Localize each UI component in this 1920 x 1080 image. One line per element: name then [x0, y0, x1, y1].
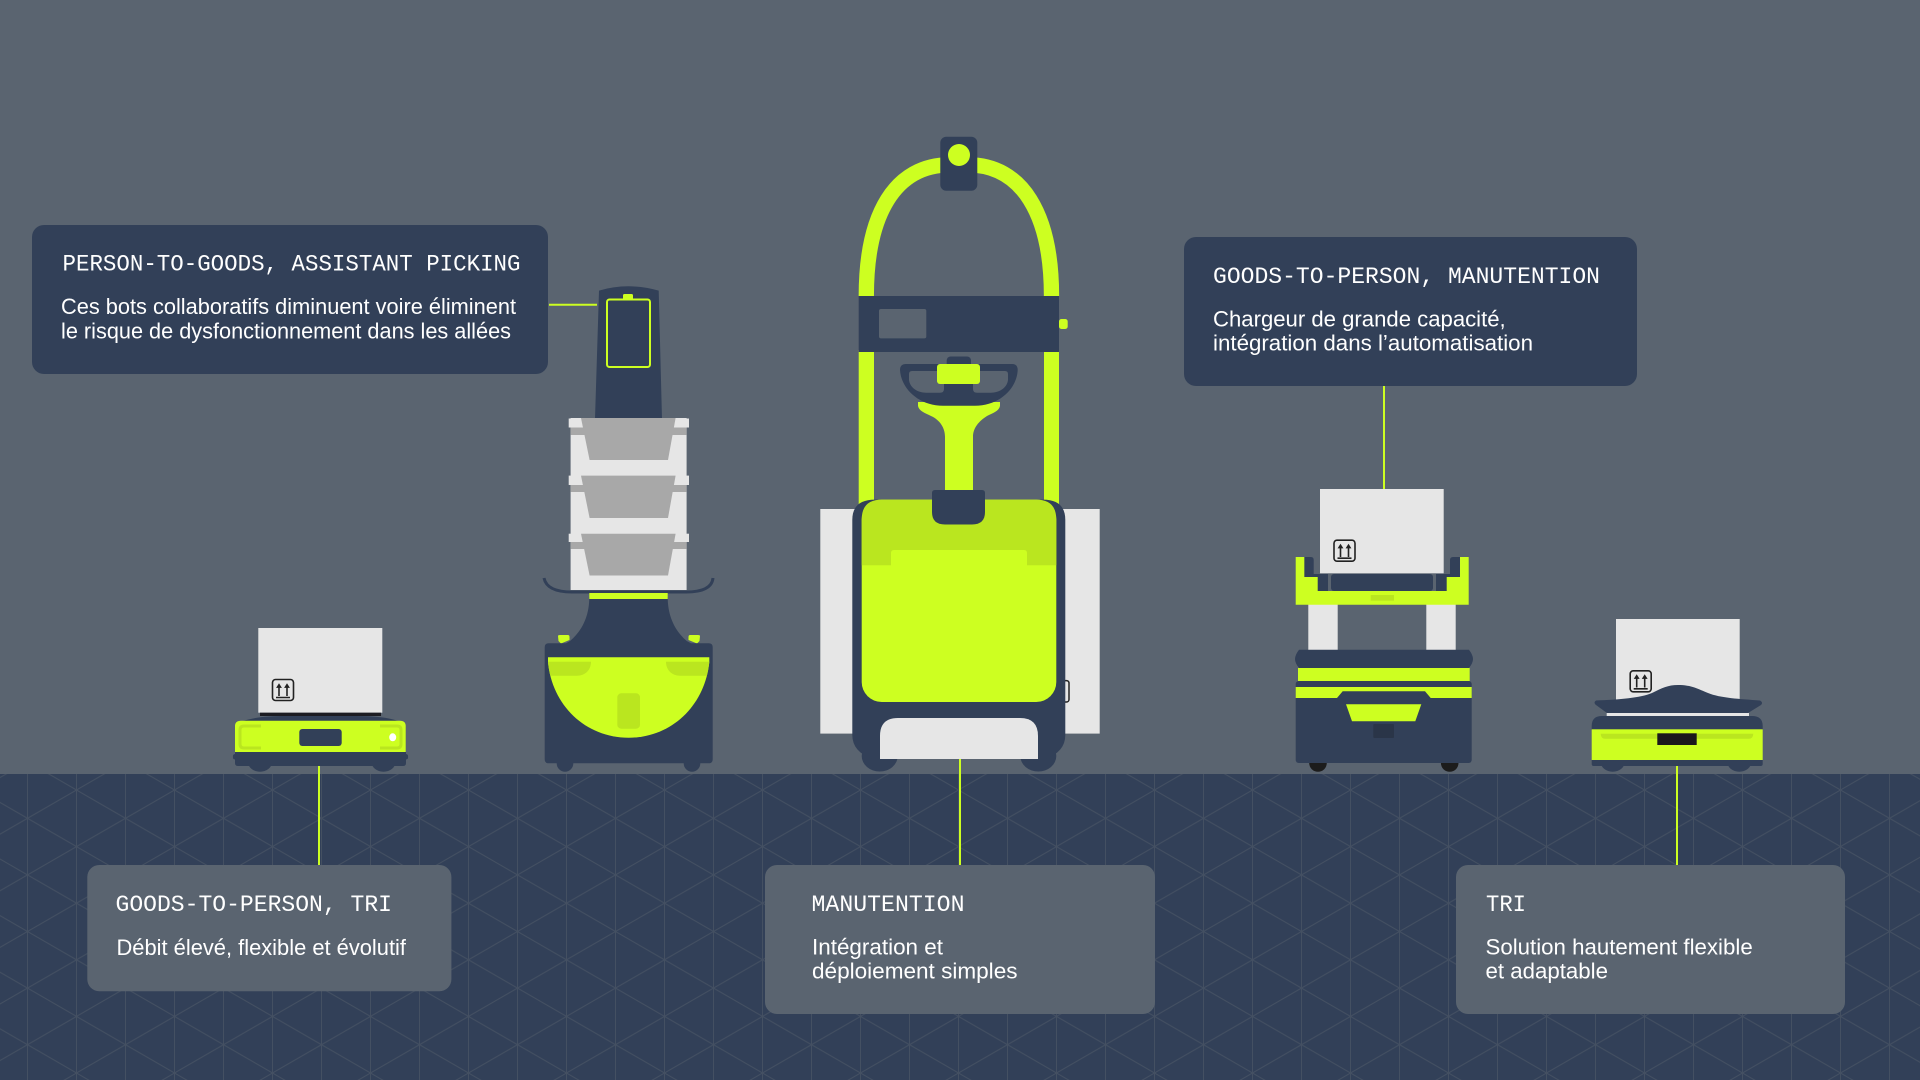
wheels	[557, 755, 700, 772]
description: et adaptable	[1486, 959, 1608, 984]
callout: goods-to-person, tri	[87, 865, 451, 991]
box	[1320, 489, 1444, 573]
icon: this side up	[1334, 540, 1355, 561]
lime trapezoid	[1346, 704, 1421, 721]
box	[258, 628, 382, 713]
mound cover	[1594, 685, 1762, 713]
robot: person-to-goods picking assistant	[544, 286, 713, 772]
connector: goods-to-person manutention	[1383, 386, 1385, 490]
robot: sorting flat	[1592, 619, 1763, 772]
bowl shading	[545, 662, 712, 729]
callout: person-to-goods, assistant picking	[32, 225, 548, 374]
connector: assistant picking	[549, 304, 597, 306]
neck and base	[545, 597, 713, 763]
steering stem	[918, 402, 1000, 495]
robot: goods-to-person sorting	[233, 628, 408, 772]
description	[1213, 306, 1533, 356]
steering handle	[900, 356, 1018, 406]
callout: tri	[1456, 865, 1845, 1014]
top plate	[1295, 650, 1473, 668]
description: Solution hautement flexible	[1486, 934, 1753, 960]
mast arch	[866, 165, 1052, 296]
body brackets	[240, 726, 401, 748]
description: le risque de dysfonctionnement dans les allées	[61, 319, 511, 344]
description: intégration dans l’automatisation	[1213, 331, 1533, 356]
description: Ces bots collaboratifs diminuent voire éliminent	[61, 294, 516, 319]
wheels	[248, 752, 396, 772]
heading: MANUTENTION	[812, 892, 964, 918]
heading: GOODS-TO-PERSON, MANUTENTION	[1213, 264, 1600, 290]
lime strip	[589, 593, 668, 599]
robot: goods-to-person handling with lift	[1295, 489, 1473, 772]
description	[61, 294, 516, 344]
white front plate	[880, 718, 1038, 759]
panel shading	[862, 500, 1056, 565]
connector: manutention	[959, 755, 961, 866]
tray mark	[1371, 595, 1394, 601]
lime strip lower with notch	[1296, 687, 1472, 698]
dark strip	[260, 713, 381, 716]
tower	[595, 286, 662, 419]
icon: partial box label	[1060, 681, 1069, 702]
robot: manutention forklift	[820, 137, 1100, 772]
lime tray	[1296, 557, 1469, 605]
wheels	[1309, 754, 1458, 772]
tray	[544, 578, 713, 592]
lime stripe	[1601, 734, 1753, 739]
lime bowl	[548, 657, 709, 738]
white strip	[1607, 713, 1749, 716]
legs	[1308, 604, 1456, 650]
camera	[940, 137, 977, 191]
heading: PERSON-TO-GOODS, ASSISTANT PICKING	[62, 252, 520, 278]
connector: goods-to-person tri	[318, 764, 320, 866]
icon: battery	[607, 294, 650, 367]
wheels	[862, 740, 1056, 772]
floor with isometric grid	[0, 774, 1920, 1080]
dark slot	[1373, 724, 1394, 738]
callout: manutention	[765, 865, 1155, 1014]
description	[1486, 934, 1753, 984]
top cover	[243, 716, 398, 721]
description	[812, 934, 1018, 984]
description: Débit élevé, flexible et évolutif	[116, 935, 407, 960]
navy base	[233, 752, 408, 766]
black display	[1657, 733, 1697, 745]
box	[1616, 619, 1740, 703]
callout: goods-to-person, manutention	[1184, 237, 1637, 386]
lime body	[1592, 729, 1763, 760]
heading: GOODS-TO-PERSON, TRI	[116, 892, 392, 918]
lime body	[235, 721, 406, 752]
band	[859, 296, 1068, 352]
lime strip upper	[1298, 668, 1470, 681]
navy inserts	[1304, 557, 1460, 591]
wheels	[1601, 752, 1751, 772]
lime tabs	[558, 635, 700, 644]
display	[299, 729, 342, 746]
chassis	[852, 500, 1065, 759]
stacked bins	[569, 418, 689, 590]
white load boards	[820, 509, 1100, 734]
icon: this side up	[272, 680, 294, 700]
connector: tri	[1676, 764, 1678, 866]
navy top	[1592, 716, 1763, 730]
collar	[932, 490, 985, 524]
icon: this side up	[1630, 671, 1651, 692]
description: Intégration et	[812, 934, 943, 960]
side bars	[859, 350, 1059, 506]
background wall	[0, 0, 1920, 774]
description: Chargeur de grande capacité,	[1213, 306, 1506, 332]
description: déploiement simples	[812, 959, 1018, 984]
navy base	[1592, 760, 1763, 766]
white light	[389, 733, 396, 741]
lime panel	[862, 500, 1056, 702]
heading: TRI	[1486, 892, 1526, 918]
base body	[1296, 681, 1472, 763]
